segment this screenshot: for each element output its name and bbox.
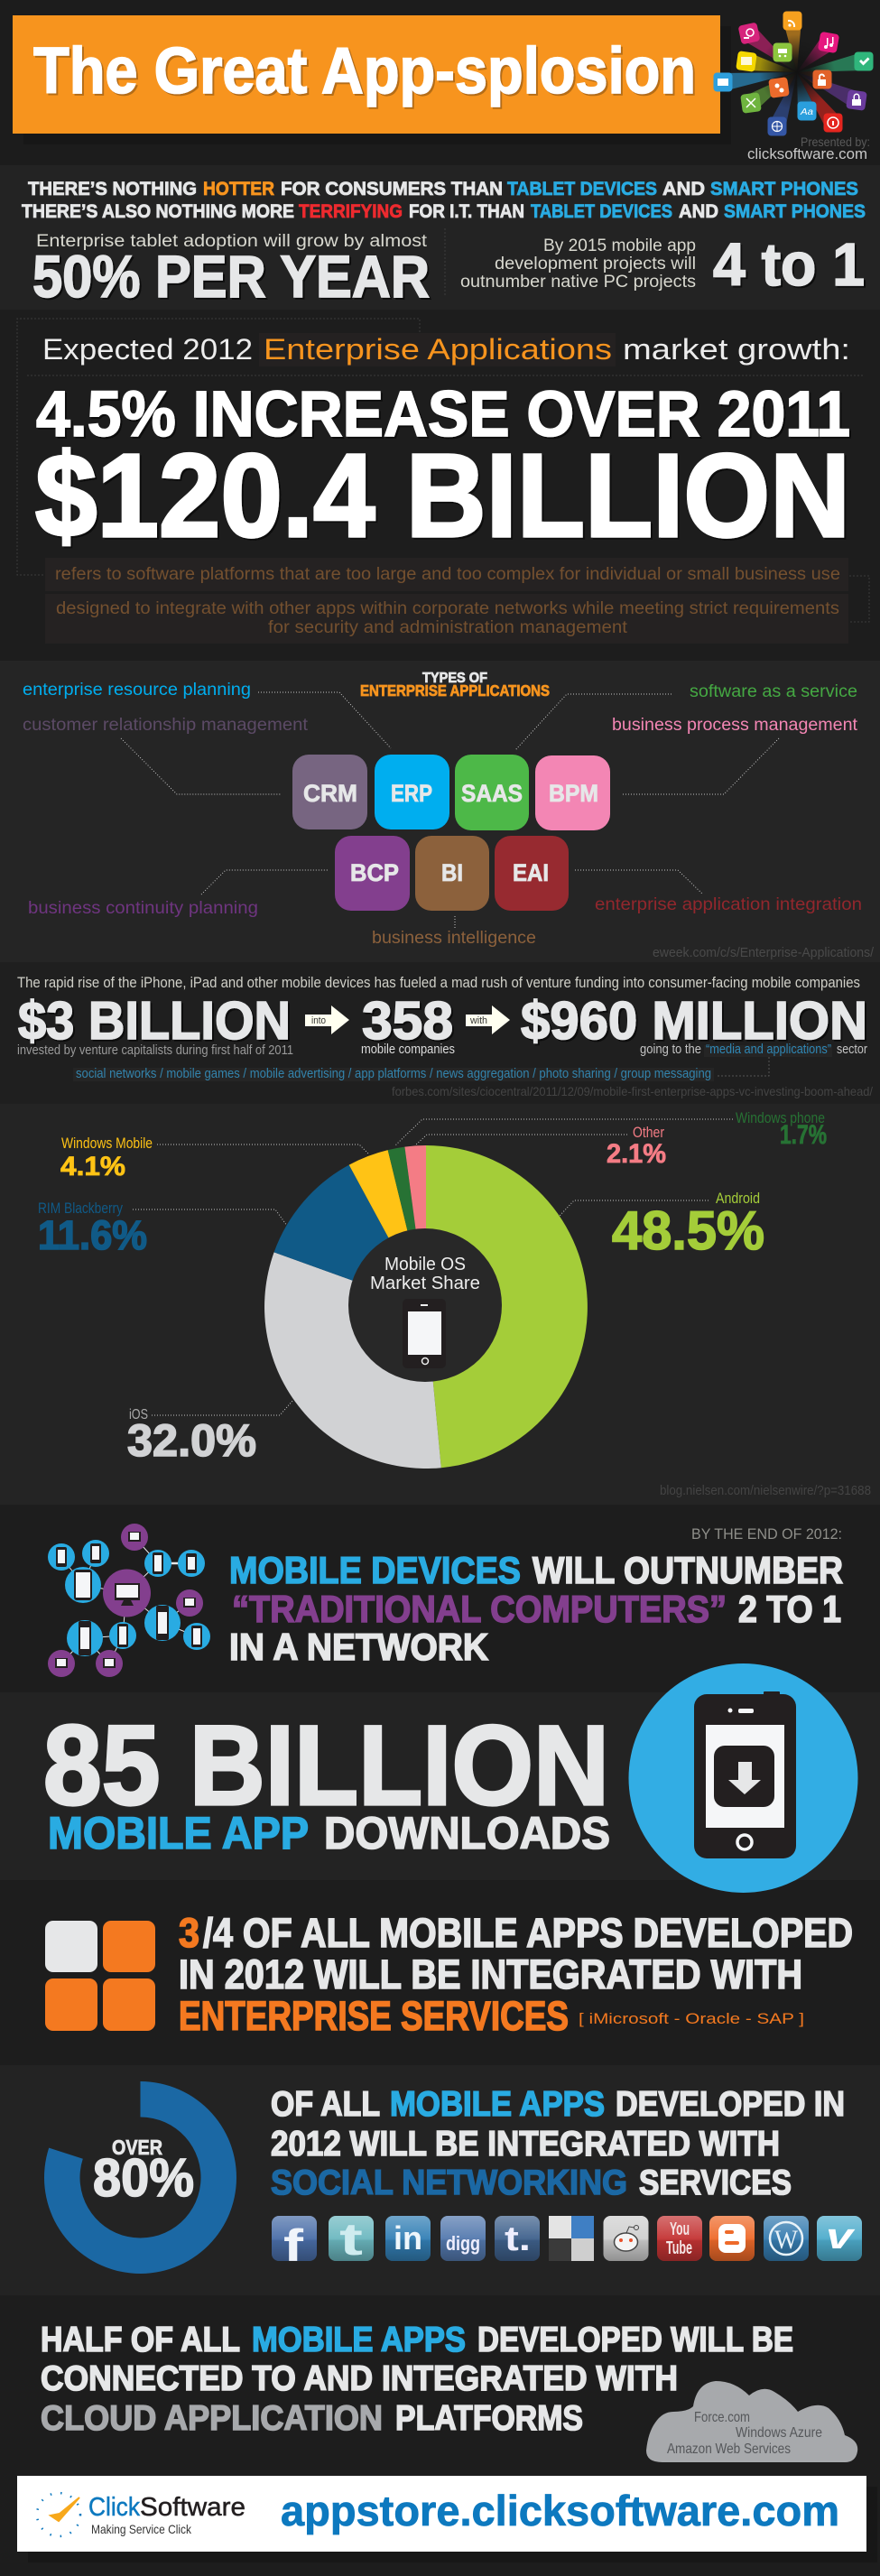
- definition: integration: [45, 594, 848, 644]
- stat: 960 million: sector: [837, 1042, 867, 1057]
- icon: blogger: [709, 2216, 755, 2261]
- kicker: by the end of 2012: BY THE END OF 2012:: [691, 1525, 842, 1543]
- icon: app burst: [713, 11, 874, 135]
- logo: clicksoftware: Software: [140, 2493, 245, 2522]
- tile: crm: CRM: [303, 780, 357, 807]
- stat: 358: 358: [362, 991, 453, 1051]
- stat caption: mobile app downloads: MOBILE APP: [48, 1808, 309, 1858]
- label: ios: 32.0%: [127, 1415, 256, 1466]
- stat caption: mobile app downloads: DOWNLOADS: [324, 1808, 610, 1858]
- donut: over 80 percent: 80%: [93, 2148, 194, 2208]
- headline: cloud platforms: DEVELOPED WILL BE: [477, 2321, 793, 2359]
- heading: types: ENTERPRISE APPLICATIONS: [360, 681, 550, 700]
- arrow: into: [305, 1005, 349, 1034]
- donut chart: [264, 1145, 588, 1469]
- logo: clicksoftware: Click: [88, 2493, 140, 2522]
- label: bi: business intelligence: [372, 929, 536, 948]
- stat: 4.5% increase: 4.5% INCREASE OVER 2011: [36, 379, 850, 450]
- stat: 960 million: $960 MILLION: [521, 991, 867, 1051]
- headline: outnumber: IN A NETWORK: [229, 1626, 488, 1668]
- icon: digg: digg: [446, 2232, 480, 2255]
- headline: social networking: OF ALL: [271, 2085, 380, 2124]
- categories list: social networks / mobile games / mobile advertising / app platforms / news aggregation / photo sharing / group messaging: [76, 1066, 711, 1081]
- panel: mobile devices outnumber: [0, 1505, 880, 1692]
- headline: consumers: TABLET DEVICES: [507, 178, 657, 199]
- headline: consumers: SMART PHONES: [710, 178, 858, 199]
- icon: twitter: t: [339, 2214, 364, 2265]
- stat: 4 to 1: outnumber native PC projects: [460, 273, 696, 292]
- stat: 960 million: “media and applications”: [706, 1042, 831, 1057]
- definition: integration: for security and administration management: [268, 618, 628, 637]
- stat: 4 to 1: 4 to 1: [713, 231, 865, 299]
- donut: over 80 percent: [44, 2081, 236, 2274]
- headline: i.t.: FOR I.T. THAN: [409, 200, 524, 222]
- heading: expected growth: Expected 2012: [42, 333, 253, 366]
- donut: over 80 percent: OVER: [112, 2136, 162, 2159]
- tile: bpm: [535, 755, 610, 830]
- chart centre title: Market Share: [370, 1274, 480, 1293]
- headline: social networking: SERVICES: [639, 2164, 792, 2202]
- icon: cloud with providers: Windows Azure: [736, 2425, 822, 2441]
- icon: device network: [48, 1524, 210, 1677]
- arrow: into: into: [311, 1015, 326, 1026]
- logo: clicksoftware: Making Service Click: [91, 2522, 192, 2536]
- tile: eai: EAI: [513, 859, 549, 886]
- label: other: Other: [633, 1124, 664, 1141]
- headline: social networking: 2012 WILL BE INTEGRATED WITH: [271, 2125, 780, 2164]
- headline: i.t.: [22, 200, 866, 222]
- label: bpm: business process management: [612, 716, 858, 735]
- definition: size: [45, 558, 848, 591]
- chart centre title: Mobile OS: [384, 1255, 466, 1274]
- label: windows phone: [736, 1109, 827, 1150]
- icon: linkedin: in: [394, 2219, 422, 2256]
- label: bcp: business continuity planning: [28, 899, 258, 918]
- headline: consumers: HOTTER: [203, 178, 274, 199]
- tile: saas: SAAS: [461, 780, 523, 807]
- headline: outnumber: [229, 1549, 843, 1668]
- headline: enterprise services: [179, 1910, 853, 2039]
- icon: cloud with providers: Force.com: [694, 2410, 750, 2425]
- heading: types: [360, 671, 550, 700]
- label: windows phone: Windows phone: [736, 1109, 825, 1126]
- label: other: [607, 1124, 666, 1169]
- headline: i.t.: AND: [679, 200, 718, 222]
- panel: cloud and footer: [0, 2295, 880, 2576]
- label: eai: enterprise application integration: [595, 895, 862, 914]
- headline: consumers: [28, 178, 858, 199]
- label: windows mobile: Windows Mobile: [61, 1135, 153, 1152]
- panel: 85 billion downloads: [0, 1692, 880, 1880]
- headline: cloud platforms: HALF OF ALL: [41, 2321, 240, 2359]
- definition: size: refers to software platforms that are too large and too complex for individual or small business use: [55, 565, 840, 584]
- headline: outnumber: “TRADITIONAL COMPUTERS”: [232, 1588, 727, 1630]
- icon: twitter: [329, 2214, 374, 2265]
- stat: 960 million: going to the: [640, 1042, 701, 1057]
- headline: enterprise services: [ iMicrosoft - Oracle - SAP ]: [579, 2010, 804, 2027]
- icon: youtube: You: [670, 2219, 690, 2239]
- headline: consumers: THERE’S NOTHING: [28, 178, 197, 199]
- label: rim blackberry: RIM Blackberry: [38, 1200, 123, 1217]
- headline: outnumber: MOBILE DEVICES: [229, 1549, 521, 1591]
- icon: four squares: [45, 1921, 155, 2031]
- icon: reddit: [603, 2216, 648, 2261]
- label: rim blackberry: 11.6%: [38, 1212, 147, 1258]
- heading: types: TYPES OF: [422, 671, 487, 686]
- tile: erp: [375, 755, 449, 829]
- text: presented by: [747, 134, 870, 162]
- text: presented by: Presented by:: [801, 134, 870, 149]
- icon: facebook: [272, 2216, 317, 2271]
- label: windows phone: 1.7%: [780, 1120, 827, 1150]
- definition: integration: designed to integrate with other apps within corporate networks while meeting strict requirements: [56, 599, 839, 618]
- headline: cloud platforms: CONNECTED TO AND INTEGRATED WITH: [41, 2359, 678, 2398]
- footer bar: [17, 2476, 877, 2562]
- panel: social networking: [0, 2065, 880, 2295]
- tile: eai: [495, 836, 569, 911]
- icon: cloud with providers: [646, 2381, 857, 2462]
- label: android: 48.5%: [612, 1200, 764, 1261]
- stat: 4 to 1: [460, 231, 865, 299]
- heading: expected growth: Enterprise Applications: [264, 333, 612, 366]
- icon: digg: [440, 2216, 486, 2261]
- headline: enterprise services: ENTERPRISE SERVICES: [179, 1993, 569, 2039]
- panel: mobile os market share: [0, 1104, 880, 1505]
- headline: social networking: DEVELOPED IN: [616, 2085, 845, 2124]
- label: crm: customer relationship management: [23, 716, 309, 735]
- panel: header: [0, 0, 880, 165]
- icon: delicious: [549, 2216, 594, 2261]
- panel: types of enterprise applications: [0, 661, 880, 962]
- label: saas: software as a service: [690, 682, 857, 701]
- headline: consumers: FOR CONSUMERS THAN: [281, 178, 503, 199]
- tile: bcp: BCP: [350, 859, 399, 886]
- panel: three quarters enterprise: [0, 1880, 880, 2065]
- headline: i.t.: TABLET DEVICES: [531, 200, 672, 222]
- headline: social networking: SOCIAL NETWORKING: [271, 2164, 627, 2202]
- stat: 120.4 billion: $120.4 BILLION: [35, 429, 850, 561]
- heading: expected growth: [42, 333, 850, 366]
- arrow: with: with: [469, 1015, 487, 1026]
- icon row: social networks: [272, 2214, 862, 2271]
- headline: i.t.: TERRIFYING: [299, 200, 403, 222]
- icon: phone: [403, 1299, 446, 1368]
- headline: enterprise services: IN 2012 WILL BE INTEGRATED WITH: [179, 1951, 802, 1997]
- tile: bi: [415, 836, 489, 911]
- tile: saas: [455, 755, 529, 830]
- icon: youtube: [657, 2216, 702, 2261]
- tile: bpm: BPM: [549, 780, 598, 807]
- tile: erp: ERP: [391, 780, 432, 807]
- headline: consumers: AND: [662, 178, 705, 199]
- headline: i.t.: THERE’S ALSO NOTHING MORE: [22, 200, 294, 222]
- stat caption: mobile app downloads: [48, 1808, 610, 1858]
- tile: crm: [292, 755, 367, 829]
- footer url: appstore.clicksoftware.com: [281, 2487, 839, 2534]
- label: ios: iOS: [129, 1407, 148, 1422]
- label: windows mobile: 4.1%: [60, 1152, 125, 1181]
- headline: i.t.: SMART PHONES: [724, 200, 866, 222]
- stat: tablet adoption: Enterprise tablet adoption will grow by almost: [36, 232, 428, 251]
- headline: outnumber: WILL OUTNUMBER: [533, 1549, 843, 1591]
- icon: facebook: f: [283, 2220, 303, 2271]
- tile: bi: BI: [441, 859, 463, 886]
- chart centre title: [370, 1255, 480, 1293]
- icon: phone download badge: [628, 1663, 857, 1893]
- headline: social networking: MOBILE APPS: [390, 2085, 605, 2124]
- stat: tablet adoption: 50% PER YEAR: [32, 243, 430, 310]
- arrow: with: [466, 1005, 510, 1034]
- panel: venture funding: [0, 962, 880, 1104]
- icon: tumblr: t.: [505, 2220, 531, 2258]
- label: windows mobile: [60, 1135, 153, 1181]
- icon: linkedin: [385, 2216, 431, 2261]
- icon: vimeo: v: [826, 2217, 857, 2256]
- stat: 4 to 1: By 2015 mobile app: [543, 236, 696, 255]
- icon: vimeo: [817, 2216, 862, 2261]
- stat: 4 to 1: development projects will: [495, 255, 696, 273]
- icon: cloud with providers: Amazon Web Services: [667, 2442, 791, 2457]
- heading: expected growth: market growth:: [623, 333, 850, 366]
- icon: app burst: Aa: [800, 107, 813, 117]
- icon: wordpress: W: [774, 2225, 799, 2255]
- headline: outnumber: 2 TO 1: [738, 1588, 841, 1630]
- icon: tumblr: [495, 2216, 540, 2261]
- logo: clicksoftware: [37, 2493, 245, 2536]
- stat: 3 billion: $3 BILLION: [18, 991, 291, 1051]
- title banner: The Great App-splosion: [33, 35, 696, 107]
- icon: youtube: Tube: [666, 2238, 692, 2258]
- headline: cloud platforms: [41, 2321, 793, 2438]
- title banner: [13, 15, 731, 144]
- stat: 3 billion: invested by venture capitalists during first half of 2011: [17, 1042, 293, 1058]
- stat: 358: mobile companies: [361, 1042, 455, 1057]
- label: other: 2.1%: [607, 1139, 666, 1169]
- icon: wordpress: [764, 2216, 809, 2261]
- text: presented by: clicksoftware.com: [747, 145, 867, 162]
- tile: bcp: [335, 836, 410, 911]
- headline: enterprise services: 3: [179, 1910, 199, 1956]
- label: erp: enterprise resource planning: [23, 681, 251, 700]
- label: android: Android: [716, 1191, 760, 1207]
- panel: tablets and smart phones: [0, 165, 880, 310]
- stat: 85 billion: 85 BILLION: [43, 1703, 609, 1829]
- panel: market growth: [0, 310, 880, 661]
- headline: cloud platforms: PLATFORMS: [395, 2399, 583, 2438]
- headline: cloud platforms: MOBILE APPS: [252, 2321, 466, 2359]
- headline: cloud platforms: CLOUD APPLICATION: [41, 2399, 383, 2438]
- headline: social networking: [271, 2085, 845, 2202]
